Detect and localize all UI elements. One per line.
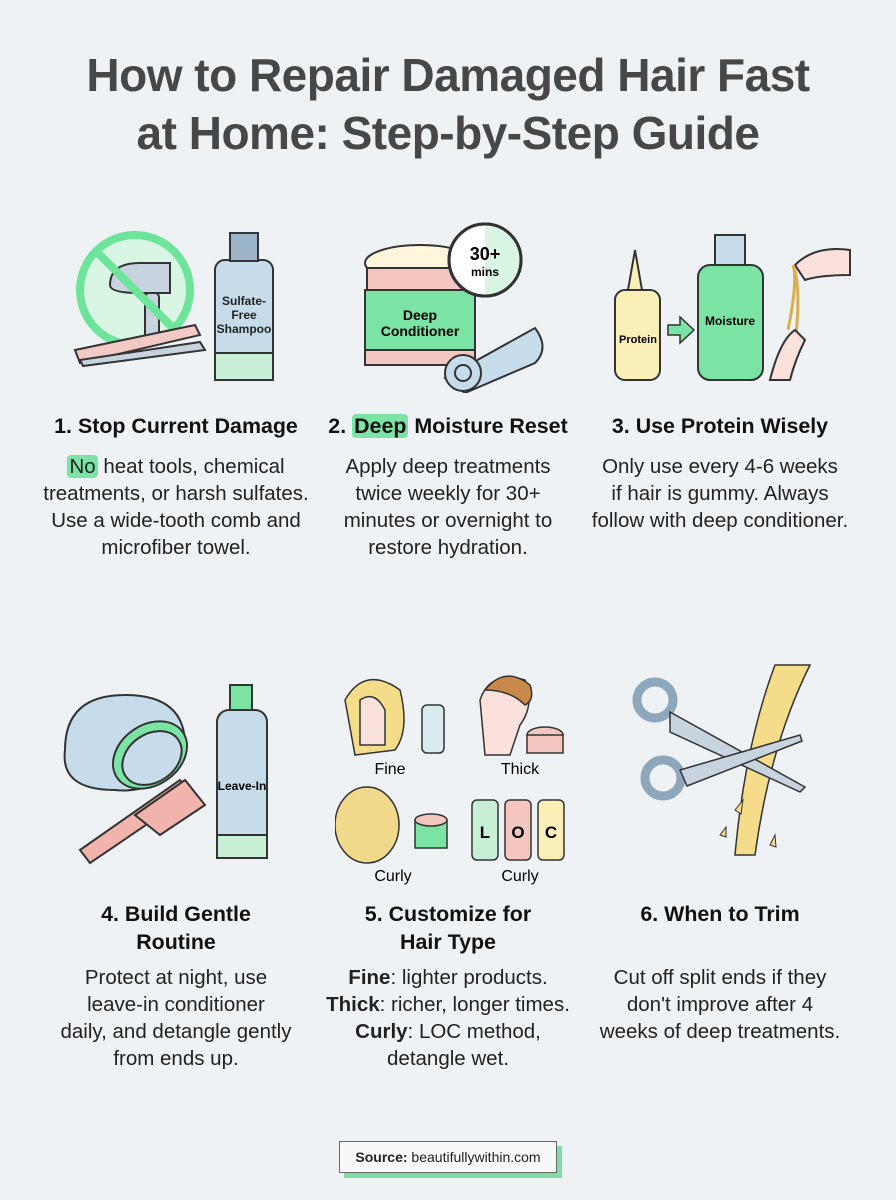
text 3: Only use every 4-6 weeks [602, 455, 838, 478]
text 2: twice weekly for 30+ [355, 482, 541, 505]
icon: protein to moisture: Moisture [705, 314, 755, 328]
icon: deep conditioner: Deep [403, 307, 437, 323]
text 4: Protect at night, use [85, 966, 267, 989]
text 3 [592, 455, 848, 532]
text 4: daily, and detangle gently [60, 1020, 292, 1043]
icon: deep conditioner: 30+ [470, 244, 500, 264]
icon: no heat tools and shampoo: Shampoo [217, 322, 271, 336]
icon: scissors and hair [632, 664, 812, 856]
heading 5: Hair Type [400, 930, 496, 954]
title: at Home: Step-by-Step Guide [137, 107, 759, 159]
icon: hair types: C [545, 823, 557, 842]
icon: protein to moisture: Protein [619, 334, 657, 346]
icon: hair types: Curly [501, 868, 539, 885]
heading 6: 6. When to Trim [640, 902, 800, 926]
icon: no heat tools and shampoo [74, 231, 274, 381]
heading 5: 5. Customize for [365, 902, 531, 926]
source: Source: beautifullywithin.com [355, 1149, 541, 1165]
text 5 [326, 966, 570, 1070]
heading 5 [365, 902, 531, 954]
text 5: Fine: lighter products. [348, 966, 548, 989]
text 1: No heat tools, chemical [69, 455, 285, 478]
title: How to Repair Damaged Hair Fast [86, 49, 810, 101]
text 6 [600, 966, 840, 1043]
icon: hair types: Curly [374, 868, 412, 885]
heading 4: Routine [136, 930, 216, 954]
icon: hair types: O [511, 823, 525, 842]
icon: hair types: Thick [501, 761, 540, 778]
text 4: leave-in conditioner [87, 993, 265, 1016]
icon: no heat tools and shampoo: Sulfate- [222, 294, 266, 308]
icon: hair types [335, 675, 565, 885]
text 6: weeks of deep treatments. [600, 1020, 840, 1043]
text 1: microfiber towel. [101, 536, 251, 559]
text 5: Thick: richer, longer times. [326, 993, 570, 1016]
title [86, 49, 810, 159]
text 1 [43, 455, 309, 559]
text 2: restore hydration. [368, 536, 528, 559]
icon: hair types: Fine [374, 761, 406, 778]
icon: deep conditioner [364, 222, 544, 393]
heading 4 [101, 902, 251, 954]
icon: protein to moisture [614, 234, 851, 381]
text 5: Curly: LOC method, [355, 1020, 541, 1043]
text 4: from ends up. [113, 1047, 239, 1070]
source [339, 1141, 557, 1173]
heading 3: 3. Use Protein Wisely [612, 414, 828, 438]
text 2: Apply deep treatments [345, 455, 551, 478]
text 1: treatments, or harsh sulfates. [43, 482, 309, 505]
text 5: detangle wet. [387, 1047, 509, 1070]
icon: hair types: L [480, 823, 490, 842]
text 1: Use a wide-tooth comb and [51, 509, 301, 532]
icon: deep conditioner: mins [471, 265, 499, 279]
text 4 [60, 966, 292, 1070]
text 2 [344, 455, 552, 559]
text 3: if hair is gummy. Always [611, 482, 829, 505]
text 6: Cut off split ends if they [614, 966, 826, 989]
text 3: follow with deep conditioner. [592, 509, 848, 532]
heading 2: 2. Deep Moisture Reset [328, 414, 568, 438]
icon: bonnet, comb, leave-in [64, 684, 268, 864]
icon: bonnet, comb, leave-in: Leave-In [218, 779, 266, 793]
heading 4: 4. Build Gentle [101, 902, 251, 926]
heading 1: 1. Stop Current Damage [54, 414, 298, 438]
icon: no heat tools and shampoo: Free [231, 308, 257, 322]
icon: deep conditioner: Conditioner [381, 323, 460, 339]
text 2: minutes or overnight to [344, 509, 552, 532]
text 6: don't improve after 4 [627, 993, 813, 1016]
